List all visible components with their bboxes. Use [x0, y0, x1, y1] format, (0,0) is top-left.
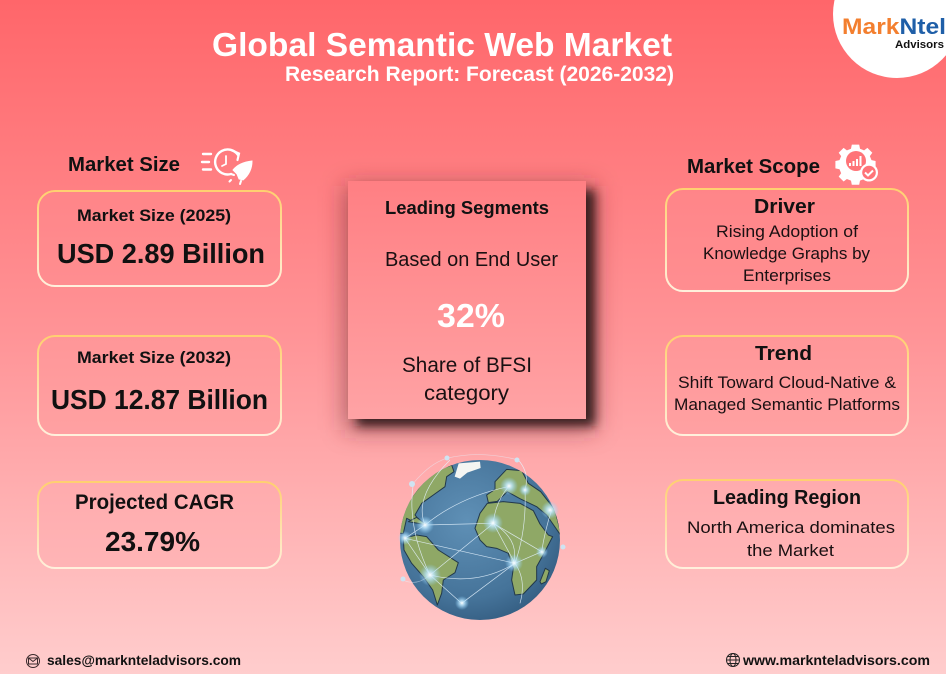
panel: Leading Segments: category: [424, 381, 509, 405]
panel: Leading Region: Leading Region: [713, 486, 861, 509]
panel: Driver: Rising Adoption of: [716, 223, 858, 241]
logo: MarkNtel Advisors: Mark Ntel: [842, 14, 946, 39]
globe: [397, 455, 566, 620]
panel: Market Size 2025: USD 2.89 Billion: [57, 238, 265, 269]
title: Research Report: Forecast (2026-2032): [285, 63, 674, 86]
panel: Market Size 2032: USD 12.87 Billion: [51, 384, 268, 415]
panel: Leading Region: North America dominates: [687, 519, 895, 537]
title: [212, 26, 674, 86]
panel: Leading Segments: 32%: [437, 297, 505, 334]
logo: MarkNtel Advisors: [833, 0, 946, 78]
icon: clock with rocket: [202, 149, 252, 184]
panel: Projected CAGR: [38, 482, 281, 568]
panel: Projected CAGR: Projected CAGR: [75, 491, 234, 514]
panel: Projected CAGR: 23.79%: [105, 526, 200, 557]
panel: Leading Segments: [345, 181, 595, 430]
panel: Leading Segments: Share of BFSI: [402, 353, 532, 377]
panel: Trend: Shift Toward Cloud-Native &: [678, 374, 896, 392]
panel: Leading Segments: Leading Segments: [385, 197, 549, 218]
title: Global Semantic Web Market: [212, 26, 672, 63]
panel: Market Size 2032: Market Size (2032): [77, 348, 231, 367]
icon: gear with chart and check: [835, 145, 878, 185]
panel: Market Size 2032: [38, 336, 281, 435]
panel: Driver: [666, 189, 908, 291]
panel: Leading Region: the Market: [747, 542, 834, 560]
logo: MarkNtel Advisors: Advisors: [895, 39, 944, 51]
panel: Driver: Enterprises: [743, 267, 831, 285]
panel: Driver: Knowledge Graphs by: [703, 245, 871, 263]
heading: Market Scope: Market Scope: [687, 156, 820, 178]
panel: Leading Region: [666, 480, 908, 568]
panel: Market Size 2025: [38, 191, 281, 286]
panel: Trend: Managed Semantic Platforms: [674, 396, 900, 414]
heading: Market Size: Market Size: [68, 154, 180, 176]
contact: website: www.marknteladvisors.com: [742, 652, 930, 668]
panel: Trend: [666, 336, 908, 435]
panel: Trend: Trend: [755, 342, 812, 365]
contact: email: sales@marknteladvisors.com: [47, 652, 241, 668]
panel: Driver: Driver: [754, 195, 815, 218]
panel: Market Size 2025: Market Size (2025): [77, 206, 231, 225]
panel: Leading Segments: Based on End User: [385, 249, 558, 271]
